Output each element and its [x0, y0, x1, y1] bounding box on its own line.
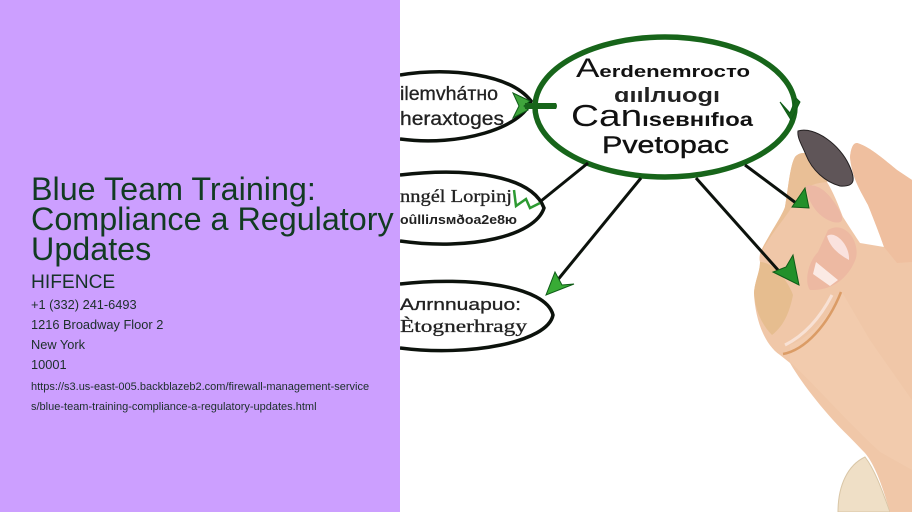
contact details: +1 (332) 241-6493 — [31, 297, 137, 312]
source url: s/blue-team-training-compliance-a-regulatory-updates.html — [31, 401, 317, 413]
thumb shading — [850, 143, 912, 263]
left node: top: ilemvháтно — [400, 84, 498, 105]
central node: Can ıseвнıfıoa — [571, 98, 754, 133]
contact details: 10001 — [31, 357, 67, 372]
palm crease highlight — [785, 295, 832, 345]
palm and wrist — [754, 143, 912, 512]
company name: HIFENCE — [31, 272, 115, 293]
green arrowheads — [513, 93, 809, 295]
icon: hand holding marker — [754, 130, 912, 512]
panel: left info panel — [0, 0, 400, 512]
index fingertip — [806, 185, 842, 222]
contact details: New York — [31, 337, 85, 352]
central node — [535, 37, 795, 177]
index finger knuckle tan area — [760, 153, 827, 255]
palm crease — [783, 292, 841, 354]
source url: https://s3.us-east-005.backblazeb2.com/firewall-management-service — [31, 381, 369, 393]
source url — [31, 381, 369, 413]
title: Updates — [31, 231, 151, 267]
central node: Pvetoрас — [602, 132, 729, 159]
fingernail highlight — [813, 262, 838, 286]
left node: middle: oûlliлsмðоа2е8ю — [400, 212, 517, 227]
lower finger tan area — [754, 262, 793, 335]
left node: top — [400, 72, 531, 141]
title: Blue Team Training: — [31, 171, 316, 207]
marker tip — [798, 130, 853, 186]
left node: bottom: Ètognerhragy — [400, 315, 527, 336]
left node: middle: nngél Lorpinj — [400, 186, 512, 206]
fingernail highlight upper — [827, 235, 849, 260]
left node: bottom — [400, 281, 553, 351]
title: Compliance a Regulatory — [31, 201, 394, 237]
left node: top: heraxtoges — [400, 109, 504, 130]
central node: ɑıılлuogı — [614, 85, 720, 107]
left node: middle — [400, 172, 544, 244]
left node: bottom: Aлrnnuapuo: — [400, 295, 521, 314]
cuff shape below the hand — [838, 457, 890, 512]
central node: A erdenemroсто — [576, 53, 750, 83]
connector arrows — [541, 163, 796, 282]
title — [31, 171, 394, 267]
contact details: 1216 Broadway Floor 2 — [31, 317, 163, 332]
palm highlight — [790, 292, 912, 470]
contact details — [31, 297, 163, 372]
illustration: hand drawing a mind map — [400, 34, 912, 512]
middle finger — [807, 227, 857, 290]
